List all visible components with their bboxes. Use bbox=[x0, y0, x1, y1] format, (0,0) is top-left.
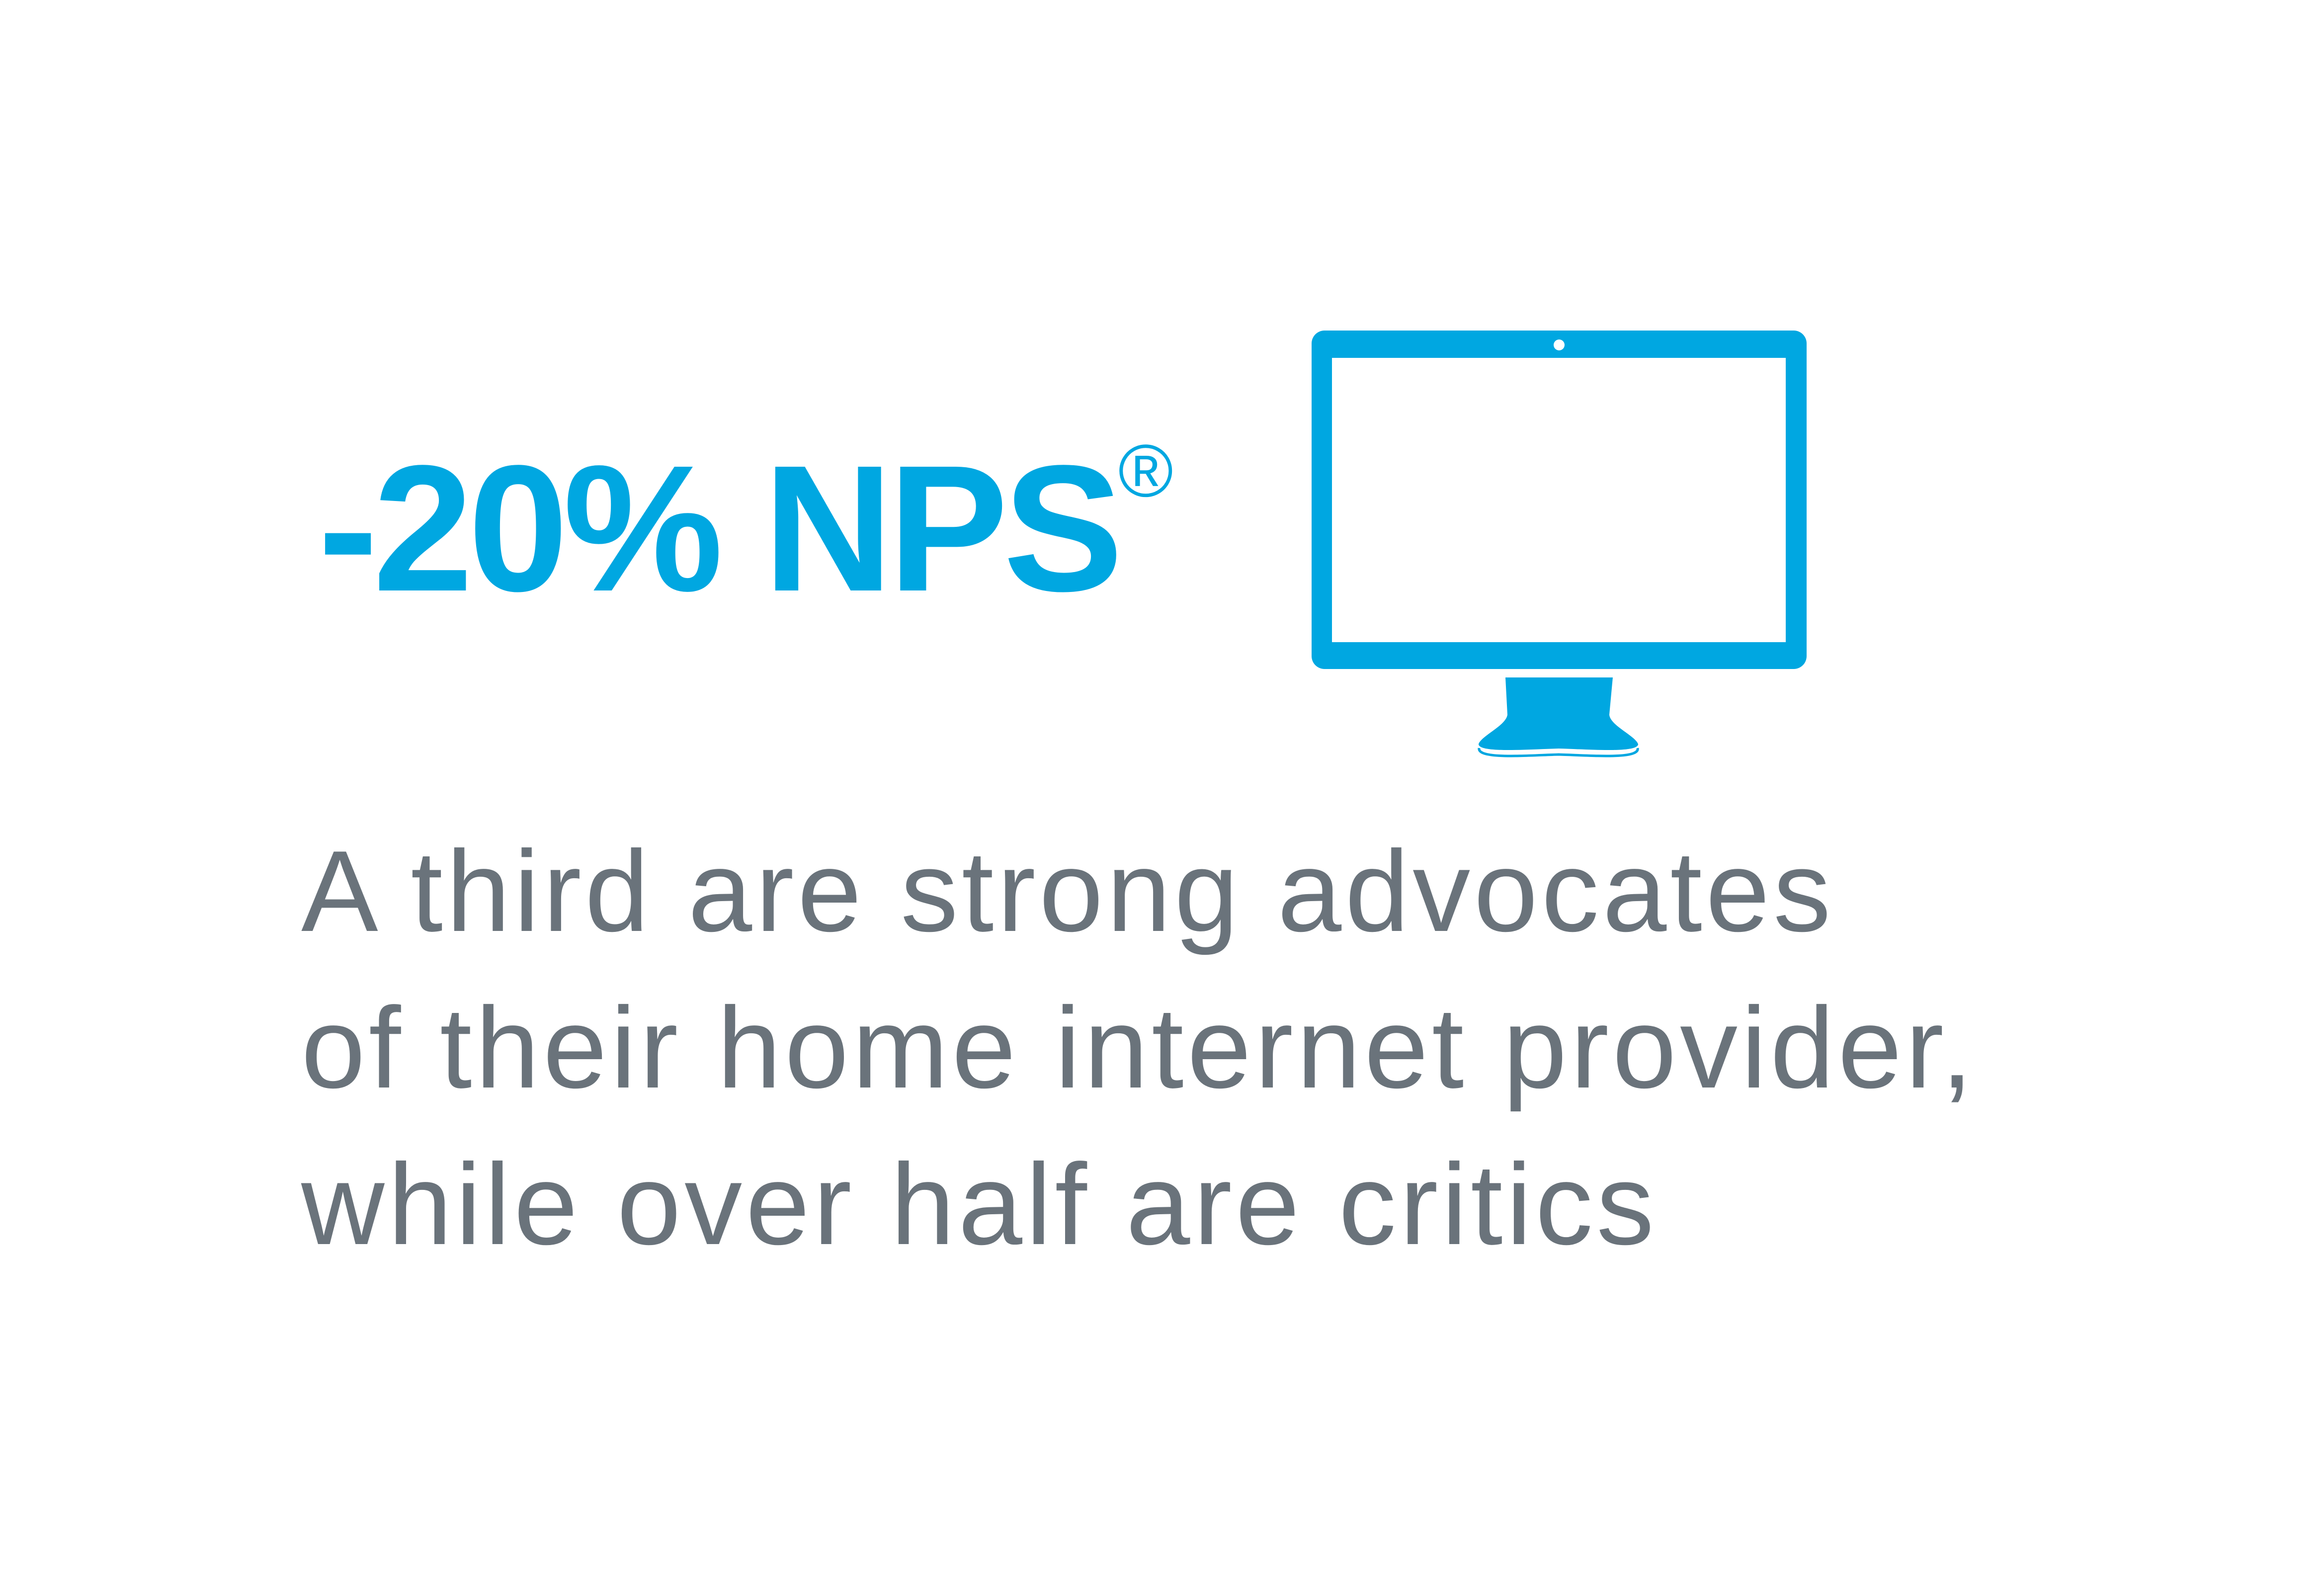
body text bbox=[301, 827, 1977, 1269]
body text: A third are strong advocates bbox=[301, 827, 1834, 956]
headline: -20% NPS: -20% NPS® bbox=[318, 427, 1168, 629]
body text: while over half are critics bbox=[301, 1140, 1658, 1269]
body text: of their home internet provider, bbox=[301, 984, 1977, 1112]
